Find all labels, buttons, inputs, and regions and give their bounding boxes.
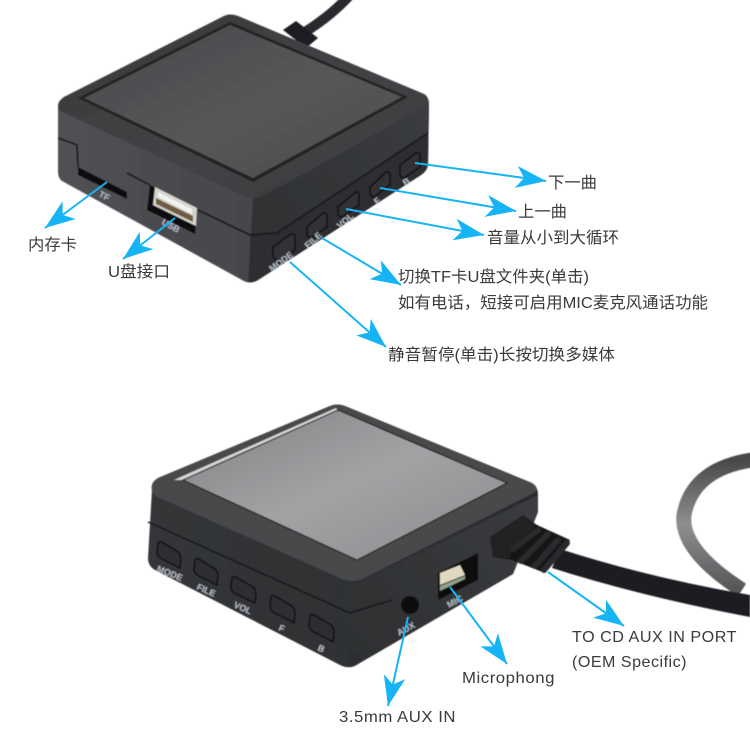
TF slot — [78, 167, 127, 199]
top device seam — [58, 133, 428, 235]
arrow: microphone — [450, 587, 507, 664]
label: memory card: 内存卡 — [28, 236, 77, 254]
MIC port — [438, 553, 478, 600]
label: file switch: 切换TF卡U盘文件夹(单击) — [398, 267, 589, 286]
label: phone call: 如有电话，短接可启用MIC麦克风通话功能 — [398, 294, 708, 312]
top device cable — [305, 0, 350, 32]
bottom device seam — [148, 522, 392, 613]
label: next track: 下一曲 — [548, 174, 597, 192]
label: mute: 静音暂停(单击)长按切换多媒体 — [388, 346, 615, 364]
label: AUX in: 3.5mm AUX IN — [339, 709, 456, 726]
bottom device upper face — [152, 404, 537, 581]
bottom device button labels: VOL — [232, 600, 254, 617]
arrows — [45, 163, 624, 706]
arrow: USB — [123, 218, 175, 259]
bottom device button labels: MODE — [155, 564, 184, 583]
label: CD AUX port: TO CD AUX IN PORT — [572, 629, 737, 646]
labels — [28, 174, 737, 726]
arrow: file — [322, 238, 401, 285]
bottom device photo — [148, 404, 750, 667]
AUX jack — [401, 596, 419, 614]
arrow: AUX — [388, 617, 408, 706]
bottom device button labels: F — [277, 623, 287, 634]
top device button labels — [267, 176, 412, 274]
bottom device rim highlight — [174, 408, 338, 480]
top device button labels: B — [401, 176, 412, 188]
top device right side — [248, 104, 429, 282]
USB port — [147, 185, 197, 234]
bottom device right side — [349, 495, 538, 667]
top device upper face — [58, 14, 427, 198]
bottom device inset panel — [183, 410, 507, 560]
bottom device body — [148, 404, 538, 667]
top device photo: USB — [160, 217, 182, 235]
top device lower shell — [250, 133, 428, 282]
bottom device photo: AUX — [395, 620, 417, 638]
top device button labels: F — [372, 195, 383, 207]
cable connector — [490, 515, 570, 573]
label: volume: 音量从小到大循环 — [487, 229, 619, 247]
bottom device button labels: B — [316, 643, 327, 655]
bottom device main cable — [552, 549, 750, 617]
top device button labels: FILE — [303, 230, 324, 250]
bottom device button labels: FILE — [195, 582, 217, 599]
bottom device photo: MIC — [445, 593, 465, 610]
label: previous track: 上一曲 — [518, 203, 567, 221]
label: USB: U盘接口 — [108, 262, 170, 281]
top device strain relief — [283, 21, 318, 48]
label: OEM: (OEM Specific) — [572, 654, 687, 671]
arrow: mode — [290, 262, 386, 347]
arrow: previous track — [380, 188, 516, 211]
top device inset panel — [78, 22, 408, 182]
bottom device buttons — [157, 542, 334, 642]
top device button labels: VOL — [335, 211, 356, 231]
bottom device button labels — [155, 564, 327, 655]
top device body — [58, 14, 429, 282]
arrow: next track — [415, 163, 546, 181]
bottom device loop cable — [684, 459, 750, 590]
top device photo: TF — [97, 189, 112, 203]
arrow: cable — [548, 572, 624, 626]
arrow: memory card — [45, 182, 107, 228]
arrow: volume — [346, 209, 484, 235]
top device buttons — [273, 153, 420, 260]
top device button labels: MODE — [267, 250, 295, 274]
label: microphone: Microphong — [462, 670, 555, 687]
top device photo — [58, 0, 429, 282]
